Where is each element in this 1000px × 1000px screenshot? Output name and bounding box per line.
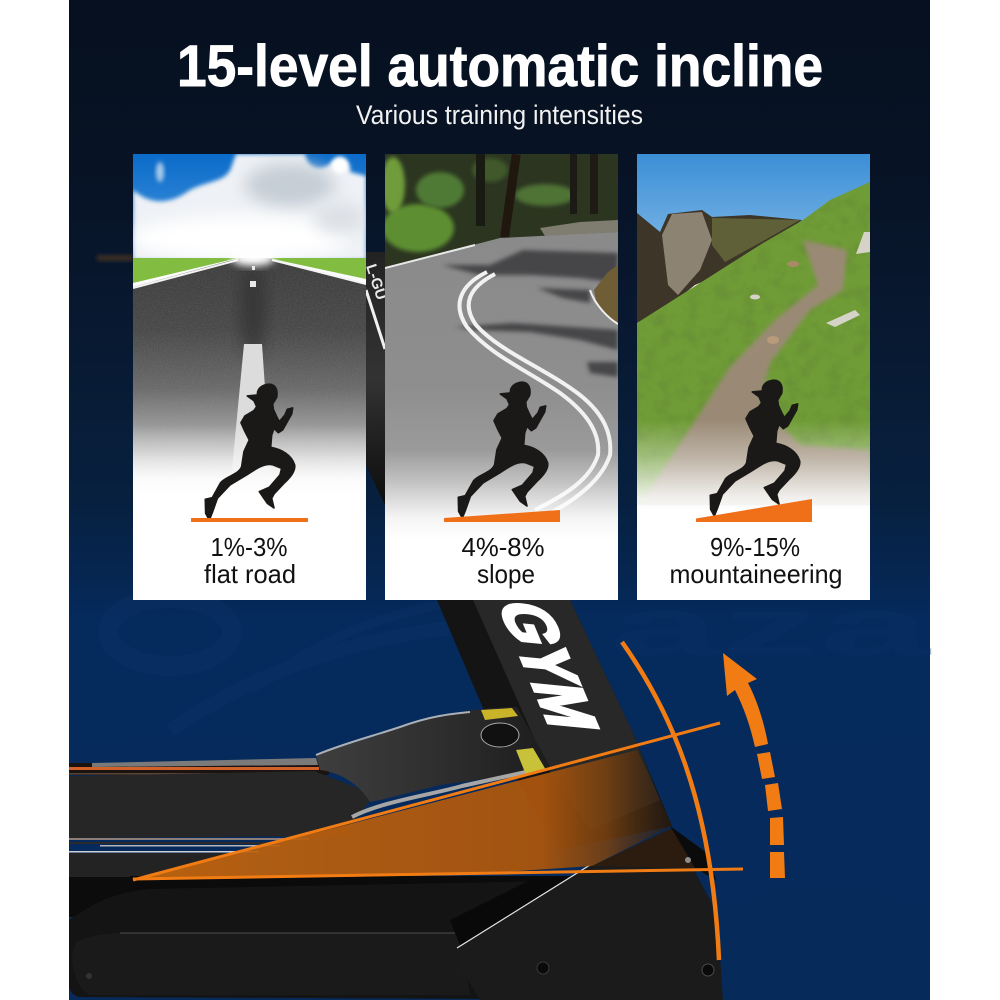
upright strip seen between panels: [362, 252, 390, 505]
centre road markings: [230, 266, 272, 490]
motor cover: [316, 707, 552, 817]
subtitle: Various training intensities: [356, 100, 643, 130]
grass verges: [133, 258, 366, 283]
faint brand watermark: [108, 582, 933, 730]
label: slope: 4%-8%: [462, 532, 544, 562]
winding road: [385, 232, 618, 540]
treadmill deck rail: [69, 758, 329, 775]
runner silhouette: [458, 382, 548, 518]
upright strip seen between panels: L-GU: [362, 262, 390, 302]
white fade: [385, 450, 618, 540]
low incline wedge: [444, 510, 560, 522]
label: flat road: [204, 532, 296, 589]
dashed upward arrow: [723, 653, 785, 878]
panel: slope: [385, 154, 618, 600]
label: flat road: 1%-3%: [210, 532, 288, 562]
asphalt road: [133, 258, 366, 495]
grassy hillside: [637, 182, 870, 505]
label: mountaineering: [670, 532, 842, 589]
road shadows: [442, 250, 618, 377]
scattered stones: [750, 232, 870, 344]
label: mountaineering: 9%-15%: [710, 532, 800, 562]
white fade: [133, 425, 366, 497]
panel: flat road: [133, 154, 366, 600]
treadmill upright post: [437, 600, 672, 850]
forest: [381, 154, 618, 269]
dirt trail: [640, 240, 870, 505]
GYM logo on upright: GYM: [481, 598, 614, 733]
base frame: [69, 878, 723, 1000]
title: 15-level automatic incline: [177, 34, 823, 99]
sky and clouds: [130, 154, 366, 260]
treadmill illustration: [69, 598, 723, 1000]
rocky outcrop: [637, 210, 802, 323]
white fade: [637, 420, 870, 525]
label: slope: slope: [477, 559, 535, 589]
label: flat road: flat road: [204, 559, 296, 589]
runner silhouette: [205, 384, 295, 520]
flat incline bar: [191, 518, 308, 522]
roadside bush: [594, 265, 618, 324]
side plate and white edge: [457, 826, 723, 1000]
label: mountaineering: mountaineering: [670, 559, 842, 589]
faint brand watermark: aza: [610, 582, 933, 673]
double centre line: [460, 272, 610, 512]
smudge left of first panel: [97, 255, 133, 261]
treadmill belt: [69, 771, 600, 917]
panel: mountaineering: [637, 154, 870, 600]
incline angle lines: [133, 642, 743, 960]
translucent orange incline wedge: [133, 750, 672, 880]
blue sky: [637, 154, 870, 254]
steep incline wedge: [696, 499, 812, 522]
horizon glow: [231, 250, 275, 266]
road edge lines: [133, 260, 366, 288]
label: slope: [462, 532, 544, 589]
runner silhouette: [710, 380, 800, 516]
